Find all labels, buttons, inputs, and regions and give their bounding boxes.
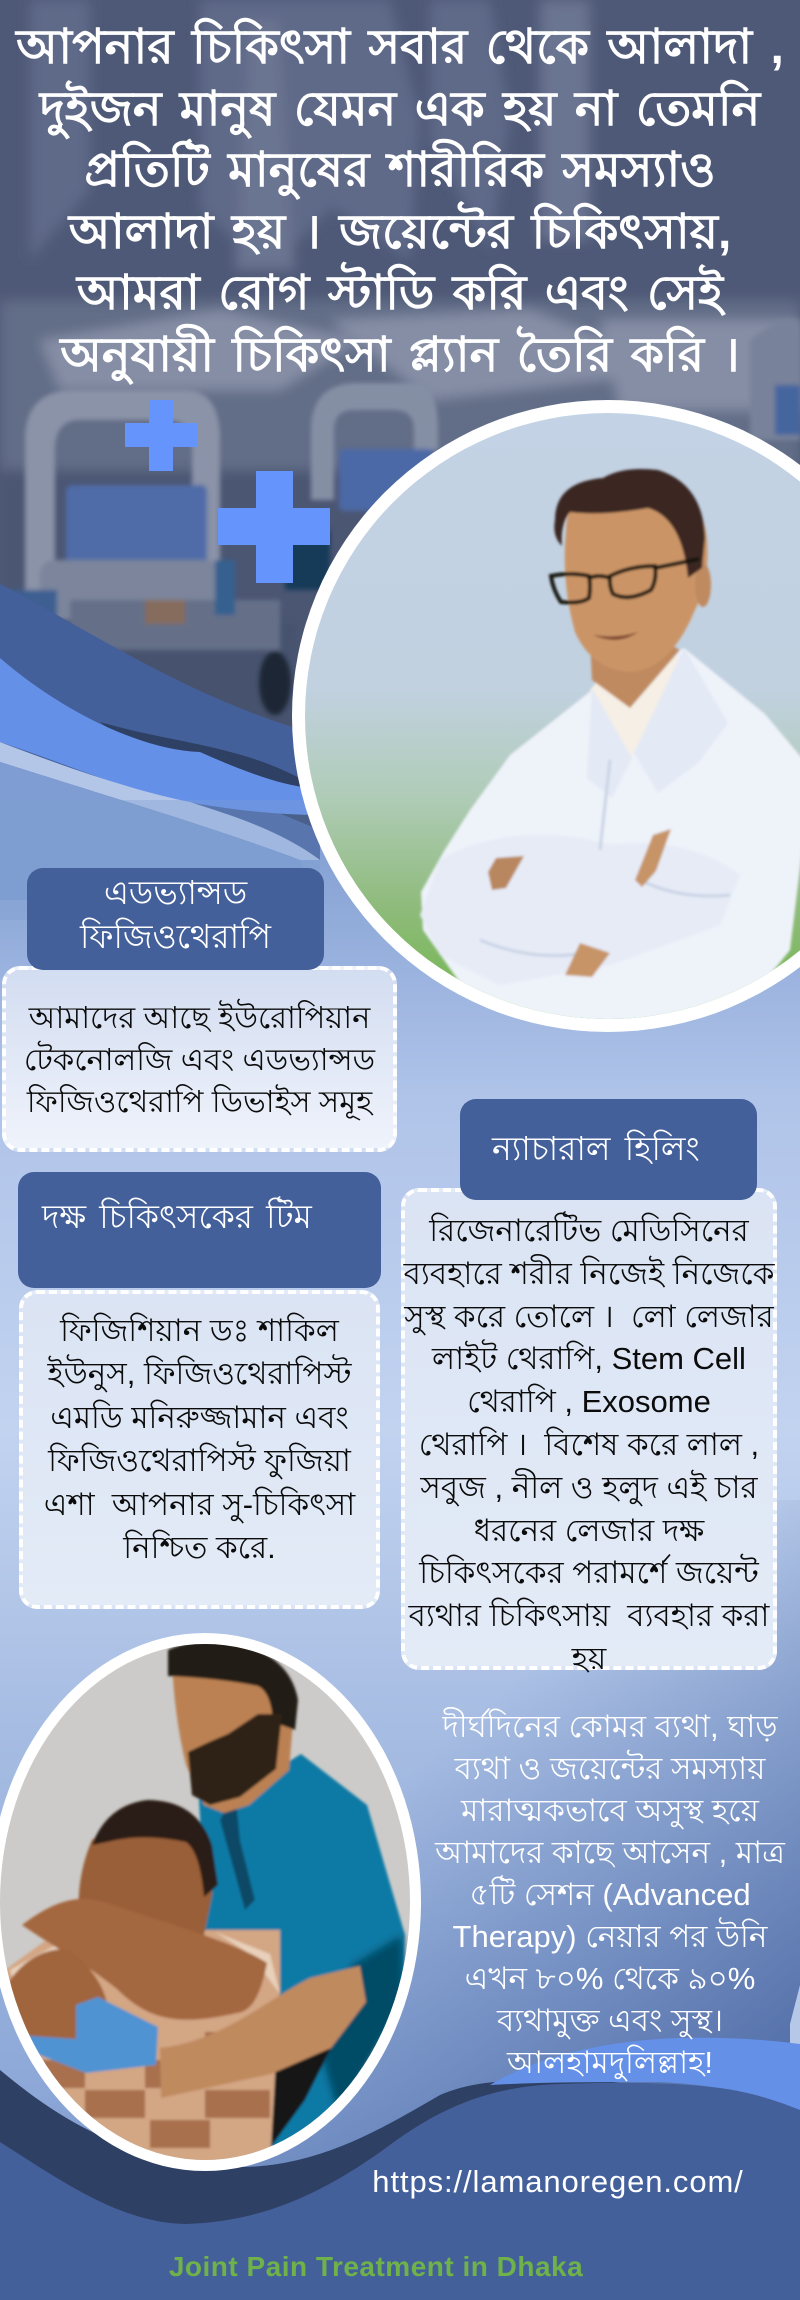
title: আপনার চিকিৎসা সবার থেকে আলাদা , [16, 21, 784, 74]
text: natural healing description: লাইট থেরাপি, Stem Cell [432, 1341, 746, 1376]
therapist head [171, 1674, 294, 1816]
heading text: natural healing: ন্যাচারাল হিলিং [492, 1130, 700, 1167]
heading text: doctors team: দক্ষ চিকিৎসকের টিম [42, 1198, 312, 1235]
icon: large medical plus [218, 471, 330, 583]
heading text: advanced physiotherapy [80, 874, 272, 955]
text: patient testimonial: দীর্ঘদিনের কোমর ব্যথা, ঘাড় [442, 1709, 778, 1744]
doctor mouth [593, 632, 638, 640]
text: patient testimonial [434, 1707, 786, 2082]
text: natural healing description: রিজেনারেটিভ মেডিসিনের [429, 1213, 749, 1248]
doctor hands [488, 856, 524, 890]
text: doctors team description: এমডি মনিরুজ্জামান এবং [50, 1400, 349, 1435]
text: patient testimonial: ব্যথা ও জয়েন্টের সমস্যায় [455, 1751, 765, 1786]
patient shirt [5, 1930, 280, 2165]
patient photo oval [0, 1630, 430, 2180]
text: natural healing description: চিকিৎসকের পরামর্শে জয়েন্ট [419, 1555, 759, 1590]
title: আমরা রোগ স্টাডি করি এবং সেই [77, 267, 723, 320]
text: advanced physiotherapy description [24, 998, 376, 1120]
icon: small medical plus [125, 400, 197, 471]
patient head [76, 1836, 215, 1936]
therapist glove [10, 1997, 158, 2073]
top left waves [0, 584, 320, 920]
heading text: advanced physiotherapy: এডভ্যান্সড [104, 874, 247, 911]
panel: natural healing card [401, 1188, 777, 1670]
text: natural healing description: ব্যথার চিকিৎসায় ব্যবহার করা [409, 1598, 769, 1633]
heading: natural healing [460, 1099, 757, 1200]
text: natural healing description: সবুজ , নীল ও হলুদ এই চার [420, 1470, 758, 1505]
hospital ward photo [0, 0, 800, 830]
text: natural healing description: থেরাপি । বিশেষ করে লাল , [419, 1427, 759, 1462]
patient arms [22, 1899, 267, 2020]
heading text: advanced physiotherapy: ফিজিওথেরাপি [80, 918, 271, 955]
text: patient testimonial: এখন ৮০% থেকে ৯০% [465, 1961, 755, 1996]
doctor photo circle [292, 400, 800, 1040]
text: doctors team description: নিশ্চিত করে. [123, 1530, 276, 1565]
text: advanced physiotherapy description: ফিজিওথেরাপি ডিভাইস সমূহ [27, 1085, 372, 1119]
doctor coat [421, 648, 800, 1040]
title: দুইজন মানুষ যেমন এক হয় না তেমনি [40, 82, 760, 136]
text: natural healing description: থেরাপি , Exosome [467, 1384, 711, 1419]
text: patient testimonial: মারাত্মকভাবে অসুস্থ হয়ে [461, 1793, 759, 1828]
title: আলাদা হয় । জয়েন্টের চিকিৎসায়, [69, 206, 731, 258]
text: patient testimonial: Therapy) নেয়ার পর উনি [453, 1919, 767, 1954]
text: patient testimonial: ৫টি সেশন (Advanced [469, 1877, 751, 1912]
text: advanced physiotherapy description: টেকনোলজি এবং এডভ্যান্সড [24, 1043, 375, 1077]
text: patient testimonial: ব্যথামুক্ত এবং সুস্থ। [497, 2003, 723, 2038]
footer label: Joint Pain Treatment in Dhaka [169, 2251, 583, 2282]
title [14, 18, 784, 385]
text: advanced physiotherapy description: আমাদের আছে ইউরোপিয়ান [29, 1001, 370, 1035]
doctor glasses [551, 559, 699, 602]
doctor hair [554, 469, 705, 578]
text: doctors team description: ইউনুস, ফিজিওথেরাপিস্ট [47, 1356, 352, 1391]
text: natural healing description: ব্যবহারে শরীর নিজেই নিজেকে [404, 1256, 774, 1291]
panel: advanced physiotherapy card [2, 966, 397, 1152]
text: natural healing description [403, 1211, 775, 1676]
doctor face [562, 506, 710, 671]
text: patient testimonial: আমাদের কাছে আসেন , মাত্র [435, 1835, 785, 1870]
therapist scrubs [199, 1754, 405, 2155]
title: অনুযায়ী চিকিৎসা প্ল্যান তৈরি করি । [60, 328, 740, 382]
therapist forearm [160, 1966, 366, 2098]
text: natural healing description: হয় [572, 1641, 606, 1676]
doctor ear [695, 563, 711, 607]
text: doctors team description: ফিজিওথেরাপিস্ট ফুজিয়া [48, 1443, 351, 1478]
website url: https://lamanoregen.com/ [372, 2164, 744, 2199]
heading: advanced physiotherapy [27, 868, 324, 970]
text: patient testimonial: আলহামদুলিল্লাহ! [507, 2045, 713, 2080]
bottom waves [0, 1985, 800, 2300]
heading: doctors team [18, 1172, 381, 1288]
doctor neck [590, 640, 680, 708]
text: natural healing description: ধরনের লেজার দক্ষ [474, 1513, 704, 1548]
title: প্রতিটি মানুষের শারীরিক সমস্যাও [84, 144, 716, 197]
text: doctors team description: এশা আপনার সু-চিকিৎসা [44, 1487, 355, 1522]
panel: doctors team card [19, 1290, 380, 1609]
text: doctors team description [44, 1312, 356, 1565]
text: natural healing description: সুস্থ করে তোলে । লো লেজার [404, 1299, 774, 1334]
text: doctors team description: ফিজিশিয়ান ডঃ শাকিল [60, 1313, 339, 1348]
